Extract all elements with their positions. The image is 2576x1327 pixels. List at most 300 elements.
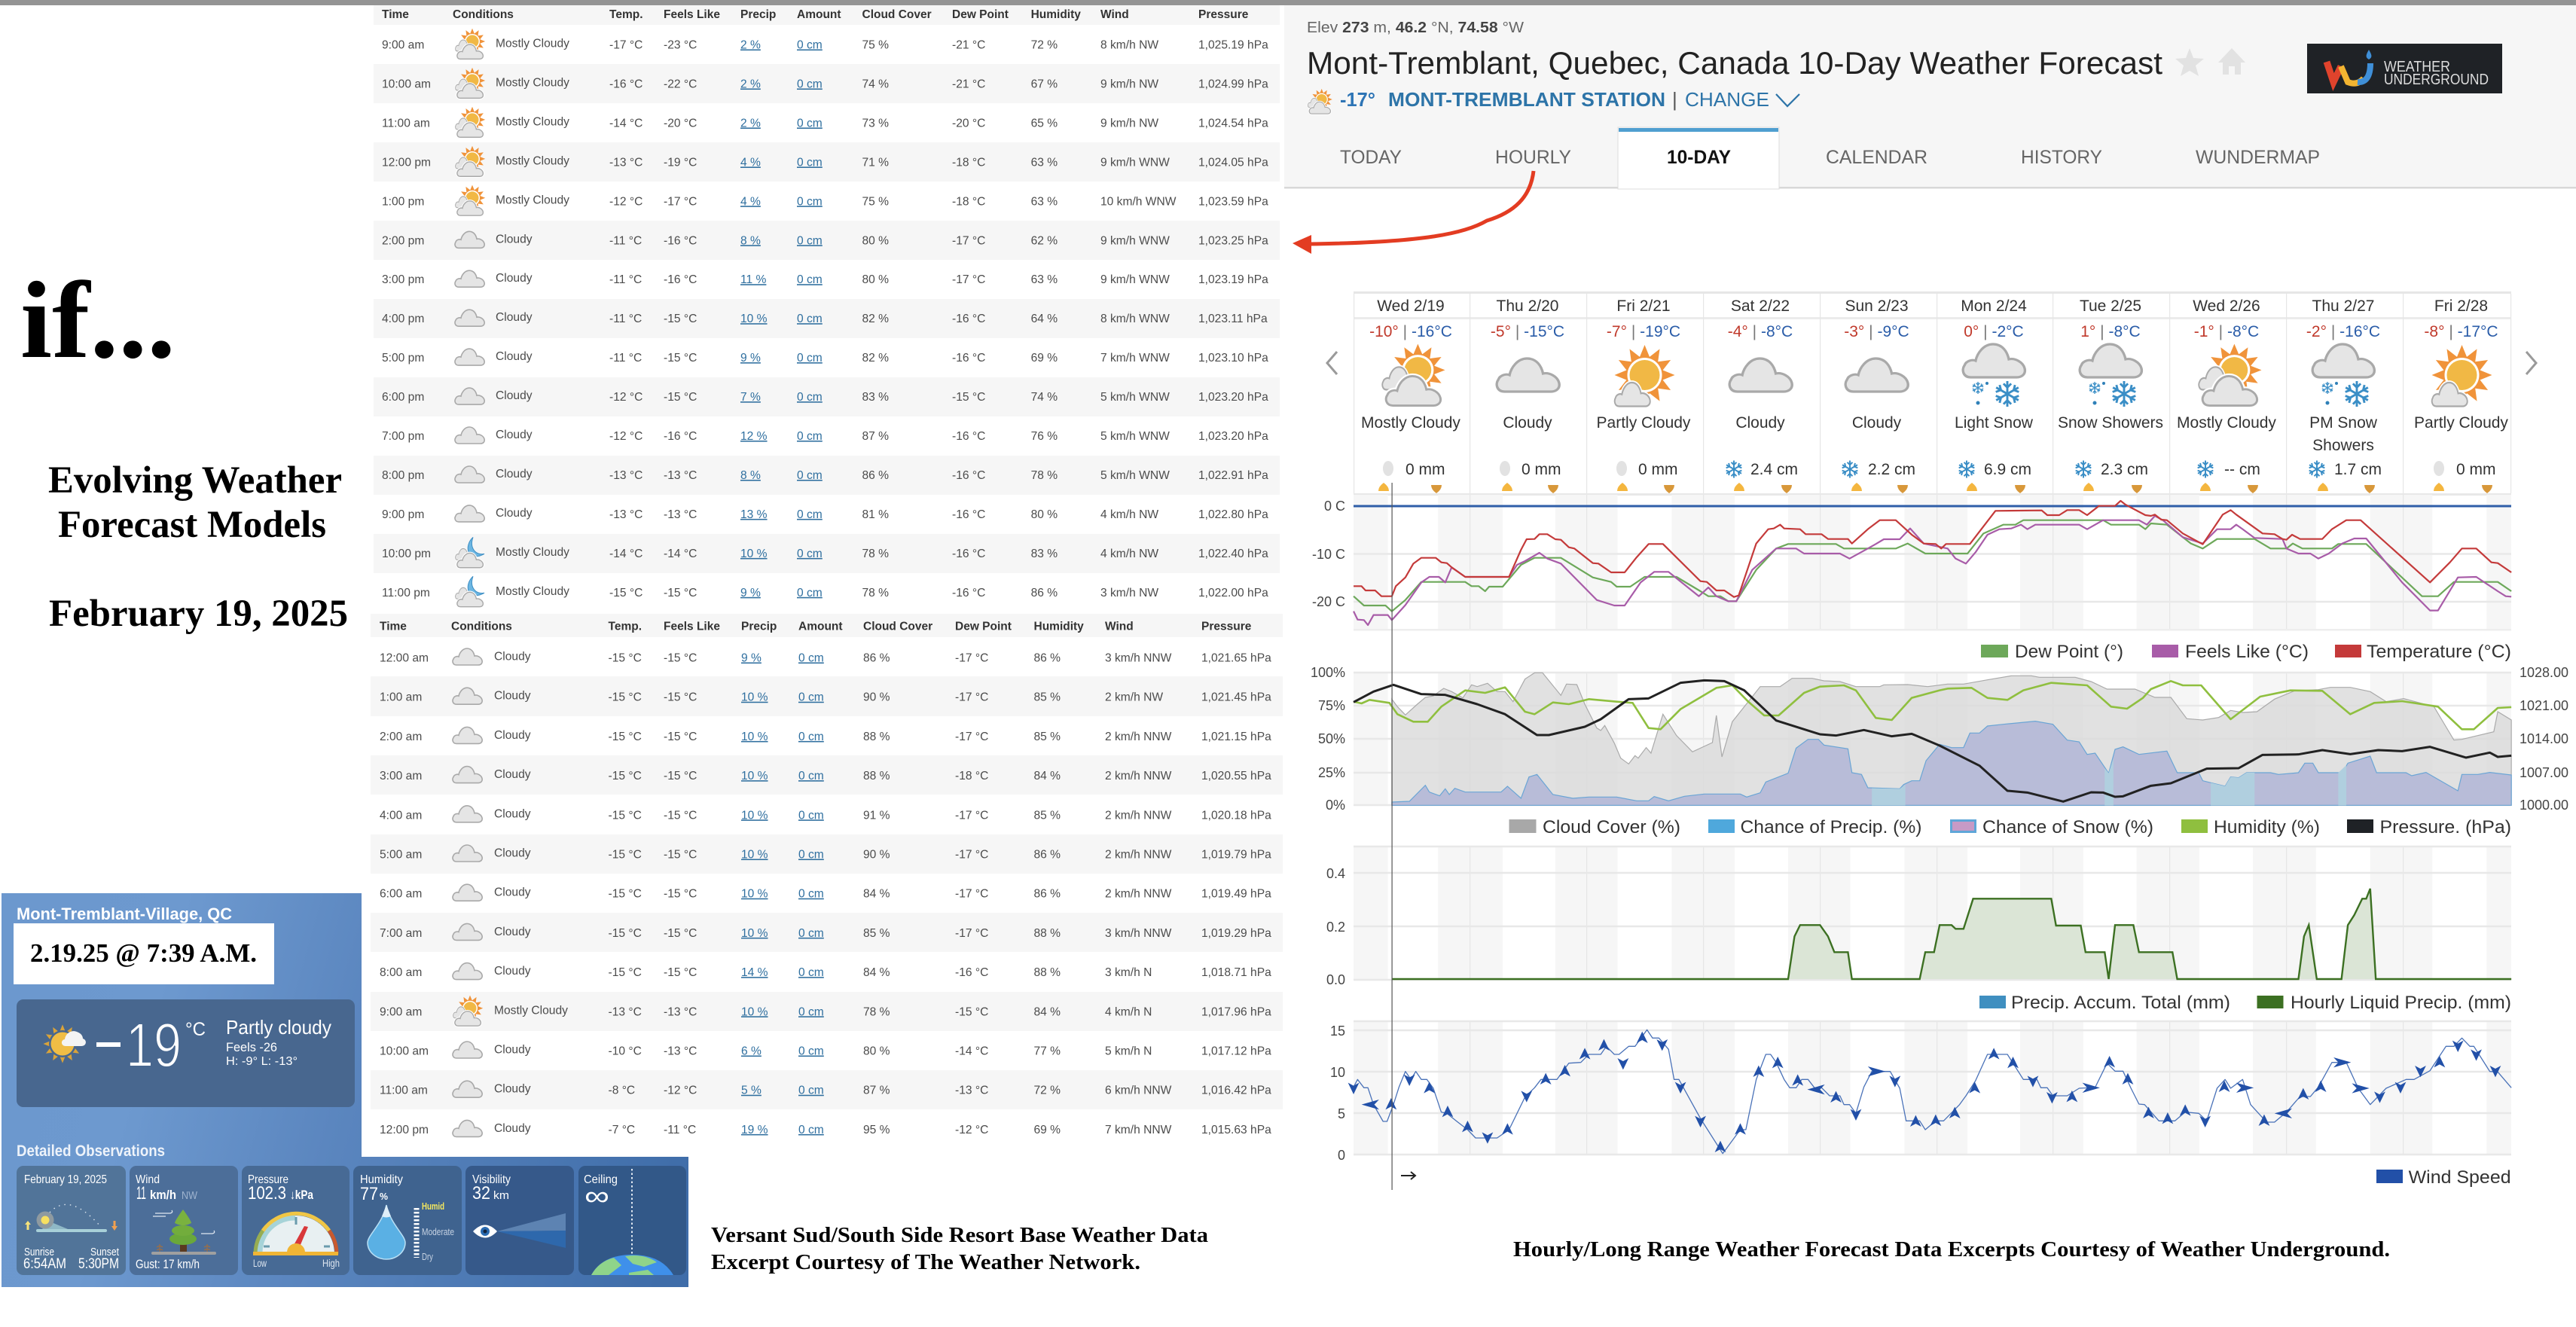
row 7:00 pm: Cloudy	[496, 429, 533, 441]
station line: MONT-TREMBLANT STATION	[1388, 88, 1665, 111]
row 11:00 am: Cloudy	[494, 1083, 531, 1096]
row 10:00 pm: Mostly Cloudy	[496, 546, 569, 559]
row 10:00 am: -13 °C	[664, 1045, 697, 1057]
row 9:00 am: -17 °C	[609, 39, 642, 51]
row 5:00 pm: 69 %	[1031, 352, 1058, 365]
precipitation totals	[1383, 461, 2496, 478]
condition summary: H: -9° L: -13°	[226, 1055, 298, 1068]
card: pressure: Pressure	[248, 1173, 288, 1186]
row 12:00 pm: Cloudy	[494, 1122, 531, 1135]
row 12:00 pm: 63 %	[1031, 156, 1058, 169]
row 8:00 pm: 8:00 pm	[382, 469, 424, 482]
row 3:00 am: 0 cm	[798, 770, 824, 782]
row 11:00 am	[382, 107, 1268, 137]
card: visibility: Visibility	[472, 1173, 511, 1186]
row 9:00 pm: 13 %	[740, 508, 768, 521]
row 12:00 pm: 19 %	[741, 1124, 768, 1136]
table header: Pressure	[1198, 8, 1249, 21]
row 12:00 pm: -18 °C	[952, 156, 985, 169]
row 7:00 pm: 5 km/h WNW	[1100, 430, 1170, 443]
row 4:00 am: -15 °C	[609, 809, 642, 822]
table header: Precip	[741, 621, 777, 633]
row 5:00 pm: Cloudy	[496, 350, 533, 363]
row 10:00 am: 0 cm	[797, 78, 823, 90]
row 12:00 pm: -12 °C	[955, 1124, 988, 1136]
row 12:00 am: 86 %	[863, 652, 890, 664]
row 11:00 am: 11:00 am	[382, 117, 430, 130]
row 6:00 pm: -15 °C	[664, 391, 697, 404]
row 7:00 pm: -12 °C	[609, 430, 642, 443]
row 5:00 am: -15 °C	[609, 848, 642, 862]
row 2:00 am: 10 %	[741, 731, 768, 743]
precipitation totals: -- cm	[2224, 461, 2260, 478]
row 10:00 am: 10:00 am	[382, 78, 431, 90]
row 11:00 am: 6 km/h NNW	[1105, 1084, 1172, 1097]
row 12:00 am: 9 %	[741, 652, 762, 664]
row 5:00 pm	[382, 349, 1268, 365]
row 6:00 pm: 74 %	[1031, 391, 1058, 404]
row 3:00 pm: 1,023.19 hPa	[1198, 273, 1268, 286]
card: pressure: High	[322, 1257, 340, 1269]
row 7:00 am: 0 cm	[798, 927, 824, 940]
panel: Weather Underground header	[1284, 5, 2576, 189]
row 11:00 am: 1,016.42 hPa	[1201, 1084, 1271, 1097]
row 6:00 am	[380, 884, 1271, 901]
row 10:00 am: 10:00 am	[380, 1045, 429, 1057]
card: ceiling	[578, 1166, 686, 1275]
axis labels	[1330, 1023, 1345, 1163]
row 4:00 am: -17 °C	[955, 809, 988, 822]
row 12:00 pm: -7 °C	[609, 1124, 635, 1136]
table header: Cloud Cover	[862, 8, 932, 21]
row 9:00 pm: 81 %	[862, 508, 889, 521]
chance of snow area	[1392, 721, 2511, 805]
row 11:00 am: -8 °C	[609, 1084, 635, 1097]
row 6:00 pm: 7 %	[740, 391, 761, 404]
row 9:00 pm	[382, 505, 1268, 522]
table header	[380, 621, 1252, 633]
row 5:00 am: 0 cm	[798, 848, 824, 862]
day dates: Thu 2/20	[1497, 297, 1558, 315]
wind speed line	[1354, 1030, 2511, 1154]
table header: Humidity	[1031, 8, 1081, 21]
row 12:00 pm	[382, 146, 1268, 176]
condition names: Snow Showers	[2058, 414, 2163, 432]
hourly table, section 2	[371, 614, 1283, 1136]
row 5:00 pm: 82 %	[862, 352, 889, 365]
row 11:00 pm: 9 %	[740, 587, 761, 599]
row 1:00 am: 85 %	[1033, 691, 1061, 704]
axis labels: -10 C	[1312, 547, 1345, 562]
right axis labels: 1000.00	[2520, 798, 2568, 813]
row 12:00 am: Cloudy	[494, 651, 531, 663]
row 9:00 am: 2 %	[740, 39, 761, 51]
row 10:00 pm: -14 °C	[664, 548, 697, 560]
row 3:00 pm: 63 %	[1031, 273, 1058, 286]
heading: Detailed Observations: Detailed Observations	[17, 1142, 165, 1160]
caption: The Weather Network credit: Excerpt Courtesy of The Weather Network.	[711, 1251, 1140, 1274]
row 2:00 pm	[382, 231, 1268, 248]
row 2:00 pm: -17 °C	[952, 234, 985, 247]
row 1:00 am	[380, 688, 1271, 704]
table header: Wind	[1100, 8, 1129, 21]
condition names: Showers	[2312, 437, 2374, 454]
row 9:00 pm: -16 °C	[952, 508, 985, 521]
row 6:00 am: 1,019.49 hPa	[1201, 888, 1271, 901]
row 1:00 pm: 75 %	[862, 195, 889, 208]
row 4:00 pm: 8 km/h WNW	[1100, 313, 1170, 325]
high and low temperatures: -7° | -19°C	[1607, 323, 1680, 340]
chart: cloud cover, precip chance, humidity, pressure	[1311, 665, 2568, 813]
row 9:00 am: 9:00 am	[382, 39, 424, 51]
row 3:00 pm: -11 °C	[609, 273, 642, 286]
row 11:00 am: 65 %	[1031, 117, 1058, 130]
row 6:00 pm: 1,023.20 hPa	[1198, 391, 1268, 404]
row 6:00 am: 86 %	[1033, 888, 1061, 901]
card: ceiling: ∞	[584, 1180, 609, 1211]
card: sunrise and sunset: 5:30PM	[78, 1256, 119, 1272]
row 12:00 am: -15 °C	[609, 652, 642, 664]
legend: temperature chart: Feels Like (°C)	[2185, 642, 2309, 662]
row 4:00 am: 4:00 am	[380, 809, 422, 822]
day dates: Wed 2/26	[2193, 297, 2260, 315]
panel: 10-day forecast strip	[1327, 291, 2536, 496]
axis labels: 0.4	[1326, 866, 1345, 881]
row 2:00 am: 1,021.15 hPa	[1201, 731, 1271, 743]
row 9:00 pm: 1,022.80 hPa	[1198, 508, 1268, 521]
row 12:00 pm: -11 °C	[664, 1124, 696, 1136]
row 6:00 pm: 6:00 pm	[382, 391, 424, 404]
table header: Feels Like	[664, 8, 720, 21]
day dates: Tue 2/25	[2080, 297, 2141, 315]
row 12:00 am: 3 km/h NNW	[1105, 652, 1172, 664]
card: wind: NW	[182, 1189, 198, 1202]
legend: precipitation chart: Hourly Liquid Precip. (mm)	[2291, 993, 2511, 1013]
card: wind: km/h	[150, 1188, 176, 1202]
row 5:00 am: 10 %	[741, 848, 768, 862]
row 4:00 pm: -16 °C	[952, 313, 985, 325]
navigation tabs: 10-DAY	[1667, 147, 1731, 168]
row 10:00 am: -16 °C	[609, 78, 642, 90]
row 6:00 pm: Cloudy	[496, 389, 533, 402]
row 1:00 pm: 10 km/h WNW	[1100, 195, 1177, 208]
icon: home	[2218, 48, 2245, 75]
row 9:00 pm: Cloudy	[496, 507, 533, 520]
precipitation totals: 0 mm	[1638, 461, 1678, 478]
row 3:00 pm: 3:00 pm	[382, 273, 424, 286]
row 8:00 pm: 86 %	[862, 469, 889, 482]
row 9:00 pm: 80 %	[1031, 508, 1058, 521]
card: sunrise and sunset	[17, 1166, 126, 1275]
row 9:00 am: -23 °C	[664, 39, 697, 51]
row 3:00 pm: -16 °C	[664, 273, 697, 286]
row 12:00 pm: 12:00 pm	[380, 1124, 429, 1136]
cloud cover area	[1392, 673, 2511, 805]
row 6:00 am: 0 cm	[798, 888, 824, 901]
high and low temperatures: -3° | -9°C	[1844, 323, 1909, 340]
row 7:00 pm: 7:00 pm	[382, 430, 424, 443]
card: ceiling: Ceiling	[584, 1173, 618, 1186]
row 8:00 pm: -16 °C	[952, 469, 985, 482]
row 8:00 pm: 8 %	[740, 469, 761, 482]
row 11:00 am: -13 °C	[955, 1084, 988, 1097]
row 4:00 am: Cloudy	[494, 807, 531, 820]
legend: temperature chart: Dew Point (°)	[2015, 642, 2123, 662]
row 11:00 pm: 78 %	[862, 587, 889, 599]
row 11:00 pm: -16 °C	[952, 587, 985, 599]
legend: temperature chart	[1981, 642, 2511, 662]
row 9:00 am	[382, 29, 1268, 59]
card: sunrise and sunset: February 19, 2025	[24, 1173, 107, 1186]
table header: Cloud Cover	[863, 621, 932, 633]
left axis labels	[1311, 665, 1345, 813]
row 4:00 am: 2 km/h NNW	[1105, 809, 1172, 822]
row 4:00 am: 10 %	[741, 809, 768, 822]
row 11:00 am: 9 km/h NW	[1100, 117, 1158, 130]
high and low temperatures: -8° | -17°C	[2424, 323, 2498, 340]
navigation tabs: HISTORY	[2021, 147, 2102, 168]
row 10:00 am: Cloudy	[494, 1044, 531, 1056]
axis labels: 0.0	[1326, 972, 1345, 987]
axis labels	[1326, 866, 1345, 987]
strip frame and dividers	[1354, 291, 2511, 496]
precipitation totals: 2.3 cm	[2101, 461, 2148, 478]
row 8:00 pm: 0 cm	[797, 469, 823, 482]
row 1:00 am: 90 %	[863, 691, 890, 704]
axis labels: 0 C	[1324, 499, 1345, 514]
precipitation totals: 0 mm	[1406, 461, 1445, 478]
subtitle line: Evolving Weather: Evolving Weather	[48, 459, 342, 501]
row 7:00 pm: 12 %	[740, 430, 768, 443]
row 6:00 am: Cloudy	[494, 886, 531, 899]
card: humidity: 77	[360, 1184, 378, 1204]
legend: precipitation chart	[1979, 993, 2511, 1013]
row 2:00 am: -17 °C	[955, 731, 988, 743]
precipitation totals: 0 mm	[1521, 461, 1561, 478]
row 6:00 pm: -15 °C	[952, 391, 985, 404]
row 4:00 am	[380, 806, 1271, 822]
row 10:00 am: 77 %	[1033, 1045, 1061, 1057]
row 3:00 am: 10 %	[741, 770, 768, 782]
page title: Mont-Tremblant, Quebec, Canada 10-Day Weather Forecast	[1307, 45, 2162, 81]
logo: Weather Underground: WEATHER	[2384, 59, 2450, 75]
row 1:00 pm: -17 °C	[664, 195, 697, 208]
row 12:00 pm: 1,024.05 hPa	[1198, 156, 1268, 169]
axis labels: 15	[1330, 1023, 1345, 1039]
row 9:00 am: 0 cm	[797, 39, 823, 51]
row 7:00 am	[380, 923, 1271, 940]
row 2:00 am: -15 °C	[609, 731, 642, 743]
row 5:00 pm: 9 %	[740, 352, 761, 365]
axis labels: 0	[1338, 1148, 1345, 1163]
row 11:00 am: 5 %	[741, 1084, 762, 1097]
row 4:00 am: 85 %	[1033, 809, 1061, 822]
row 11:00 pm: -15 °C	[609, 587, 642, 599]
row 12:00 am: 1,021.65 hPa	[1201, 652, 1271, 664]
high and low temperatures: -10° | -16°C	[1369, 323, 1452, 340]
row 2:00 pm: 62 %	[1031, 234, 1058, 247]
row 9:00 am: 1,017.96 hPa	[1201, 1005, 1271, 1018]
row 7:00 am: 7:00 am	[380, 927, 422, 940]
left axis labels: 75%	[1318, 698, 1345, 713]
row 9:00 am: -21 °C	[952, 39, 985, 51]
row 10:00 pm: -14 °C	[609, 548, 642, 560]
row 4:00 pm: -15 °C	[664, 313, 697, 325]
row 11:00 pm: 11:00 pm	[382, 587, 430, 599]
row 10:00 am: 67 %	[1031, 78, 1058, 90]
condition names: Light Snow	[1955, 414, 2034, 432]
row 5:00 am	[380, 845, 1271, 862]
icon: sun with cloud	[43, 1024, 86, 1063]
row 7:00 am: Cloudy	[494, 926, 531, 938]
row 10:00 pm: 83 %	[1031, 548, 1058, 560]
caption: The Weather Network credit	[711, 1224, 1208, 1274]
row 1:00 am: 1,021.45 hPa	[1201, 691, 1271, 704]
card: sunrise and sunset: Sunrise	[24, 1246, 54, 1258]
row 10:00 am: 80 %	[863, 1045, 890, 1057]
row 3:00 am: 84 %	[1033, 770, 1061, 782]
navigation tabs: CALENDAR	[1826, 147, 1927, 168]
row 12:00 pm: -13 °C	[609, 156, 642, 169]
card: humidity: Humid	[422, 1201, 444, 1212]
row 12:00 pm: 71 %	[862, 156, 889, 169]
row 1:00 am: -15 °C	[609, 691, 642, 704]
row 3:00 am	[380, 767, 1271, 783]
table header	[382, 8, 1249, 21]
row 12:00 am: 86 %	[1033, 652, 1061, 664]
row 8:00 am: 0 cm	[798, 966, 824, 979]
row 2:00 am: 88 %	[863, 731, 890, 743]
row 3:00 am: 88 %	[863, 770, 890, 782]
row 4:00 pm: 4:00 pm	[382, 313, 424, 325]
row 10:00 pm: 10 %	[740, 548, 768, 560]
table header: Conditions	[453, 8, 514, 21]
active tab background	[1618, 127, 1779, 189]
row 1:00 pm: Mostly Cloudy	[496, 194, 569, 206]
row 5:00 am: 5:00 am	[380, 848, 422, 862]
row 2:00 am: 2 km/h NNW	[1105, 731, 1172, 743]
row 5:00 pm: 5:00 pm	[382, 352, 424, 365]
row 1:00 am: -17 °C	[955, 691, 988, 704]
row 5:00 am: 90 %	[863, 848, 890, 862]
row 7:00 pm: 87 %	[862, 430, 889, 443]
row 11:00 am: 1,024.54 hPa	[1198, 117, 1268, 130]
feels like line	[1354, 516, 2511, 625]
row 9:00 am: Mostly Cloudy	[496, 38, 569, 50]
row 5:00 pm: 1,023.10 hPa	[1198, 352, 1268, 365]
row 7:00 am: -15 °C	[609, 927, 642, 940]
row 3:00 pm: -17 °C	[952, 273, 985, 286]
day dates: Mon 2/24	[1961, 297, 2027, 315]
row 12:00 pm: 12:00 pm	[382, 156, 431, 169]
row 4:00 pm: -11 °C	[609, 313, 642, 325]
legend: cloud cover chart: Chance of Precip. (%)	[1740, 817, 1922, 837]
row 1:00 am: -15 °C	[664, 691, 697, 704]
row 4:00 pm: 64 %	[1031, 313, 1058, 325]
chart: precipitation	[1326, 846, 2511, 987]
station line	[1308, 88, 1799, 114]
row 8:00 pm: 78 %	[1031, 469, 1058, 482]
row 8:00 am: -15 °C	[664, 966, 697, 979]
row 8:00 am: 8:00 am	[380, 966, 422, 979]
table header: Precip	[740, 8, 776, 21]
condition names: Cloudy	[1852, 414, 1902, 432]
row 4:00 pm: Cloudy	[496, 311, 533, 324]
left axis labels: 25%	[1318, 765, 1345, 780]
row 10:00 am: 1,017.12 hPa	[1201, 1045, 1271, 1057]
row 12:00 pm: 95 %	[863, 1124, 890, 1136]
row 5:00 pm: 0 cm	[797, 352, 823, 365]
axis labels: 0.2	[1326, 920, 1345, 935]
row 7:00 pm	[382, 427, 1268, 444]
row 3:00 am: 3:00 am	[380, 770, 422, 782]
row 9:00 pm: -13 °C	[664, 508, 697, 521]
row 3:00 pm: Cloudy	[496, 272, 533, 285]
carousel arrow right	[2526, 352, 2536, 374]
row 7:00 am: 10 %	[741, 927, 768, 940]
row 2:00 pm: 9 km/h WNW	[1100, 234, 1170, 247]
row 7:00 pm: 0 cm	[797, 430, 823, 443]
row 6:00 pm	[382, 388, 1268, 404]
row 12:00 pm: 9 km/h WNW	[1100, 156, 1170, 169]
table header: Time	[380, 621, 407, 633]
high and low temperatures: -5° | -15°C	[1491, 323, 1564, 340]
row 1:00 am: 0 cm	[798, 691, 824, 704]
row 6:00 am: 2 km/h NNW	[1105, 888, 1172, 901]
row 2:00 pm: -16 °C	[664, 234, 697, 247]
row 2:00 pm: -11 °C	[609, 234, 642, 247]
row 7:00 am: -15 °C	[664, 927, 697, 940]
row 4:00 pm	[382, 310, 1268, 326]
row 2:00 pm: 8 %	[740, 234, 761, 247]
table header: Temp.	[609, 8, 643, 21]
row 9:00 am: 10 %	[741, 1005, 768, 1018]
row 6:00 am: 84 %	[863, 888, 890, 901]
row 1:00 pm	[382, 185, 1268, 215]
table header: Conditions	[451, 621, 512, 633]
row 12:00 am: -17 °C	[955, 652, 988, 664]
row 1:00 am: 1:00 am	[380, 691, 422, 704]
row 2:00 am: 0 cm	[798, 731, 824, 743]
row 9:00 am: Mostly Cloudy	[494, 1004, 568, 1017]
table header: Amount	[798, 621, 843, 633]
row 8:00 am: 88 %	[1033, 966, 1061, 979]
row 5:00 am: 2 km/h NNW	[1105, 848, 1172, 862]
subtitle line: Forecast Models: Forecast Models	[58, 503, 326, 545]
right axis labels: 1014.00	[2520, 731, 2568, 746]
row 10:00 pm: -16 °C	[952, 548, 985, 560]
legend: cloud cover chart: Cloud Cover (%)	[1543, 817, 1680, 837]
row 11:00 pm	[382, 576, 1268, 607]
card: pressure: 102.3	[248, 1183, 286, 1203]
row 10:00 am: -10 °C	[609, 1045, 642, 1057]
row 2:00 am: 2:00 am	[380, 731, 422, 743]
row 3:00 pm	[382, 270, 1268, 287]
row 10:00 am: -21 °C	[952, 78, 985, 90]
high and low temperatures: -1° | -8°C	[2194, 323, 2259, 340]
row 11:00 am: -14 °C	[609, 117, 642, 130]
row 11:00 am: 0 cm	[797, 117, 823, 130]
row 9:00 am: 4 km/h N	[1105, 1005, 1152, 1018]
row 3:00 am: 2 km/h NNW	[1105, 770, 1172, 782]
row 1:00 am: 10 %	[741, 691, 768, 704]
row 6:00 am: 6:00 am	[380, 888, 422, 901]
row 6:00 am: 10 %	[741, 888, 768, 901]
chance of precipitation segments	[1872, 758, 2346, 805]
row 11:00 am: 0 cm	[798, 1084, 824, 1097]
forecast icons	[1382, 344, 2492, 407]
card: sunrise and sunset: Sunset	[90, 1246, 120, 1258]
